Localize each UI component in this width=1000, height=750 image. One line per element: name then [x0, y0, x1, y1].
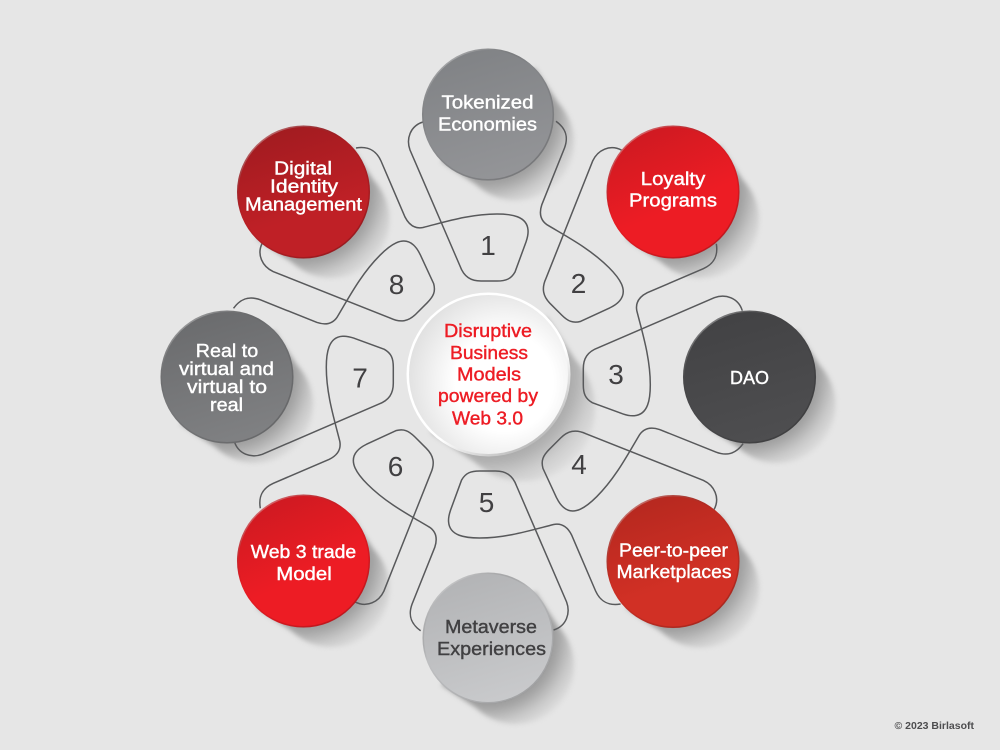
node: Peer-to-peer Marketplaces: Marketplaces [616, 561, 732, 582]
node: Real to virtual and virtual to real: real [210, 394, 243, 415]
drop shadows of the circles [180, 68, 836, 724]
node: Metaverse Experiences: Metaverse [445, 616, 537, 637]
connector loop 6 [281, 415, 515, 649]
node: DAO [683, 310, 816, 444]
connector loop 4 [527, 350, 761, 584]
node: Web 3 trade Model: Web 3 trade [251, 541, 356, 562]
connector loop 7 [234, 336, 393, 508]
connector loop 1 [356, 122, 528, 281]
copyright: © 2023 Birlasoft [894, 721, 975, 732]
node: Real to virtual and virtual to real: virtual to [187, 376, 267, 397]
centre hub: Disruptive Business Models powered by Web 3.0: Models [457, 364, 521, 384]
centre hub: Disruptive Business Models powered by Web 3.0: Web 3.0 [452, 408, 523, 428]
node: Digital Identity Management: Identity [270, 176, 339, 197]
connector loop 3 [583, 244, 742, 416]
node: Metaverse Experiences: Experiences [437, 638, 546, 659]
number 6: 6 [388, 451, 403, 482]
node: Loyalty Programs [606, 126, 740, 258]
connector loop 8 [215, 168, 449, 402]
node: Web 3 trade Model [237, 494, 370, 628]
node: Digital Identity Management: Digital [274, 158, 332, 178]
centre hub: Disruptive Business Models powered by Web 3.0: Business [450, 342, 528, 363]
node: Tokenized Economies: Tokenized [442, 92, 534, 113]
node: Metaverse Experiences [422, 572, 554, 704]
node: Loyalty Programs: Programs [629, 190, 717, 211]
centre hub: Disruptive Business Models powered by Web 3.0: Disruptive [444, 320, 532, 341]
node: Digital Identity Management: Management [245, 194, 362, 215]
node: Web 3 trade Model: Model [276, 563, 332, 584]
number 3: 3 [608, 359, 624, 390]
node: Real to virtual and virtual to real [160, 310, 294, 444]
number 4: 4 [571, 449, 587, 480]
centre hub: Disruptive Business Models powered by Web 3.0 [406, 292, 570, 456]
node: Digital Identity Management [237, 126, 370, 258]
number 1: 1 [480, 230, 496, 261]
node: Peer-to-peer Marketplaces: Peer-to-peer [619, 540, 728, 561]
connector loop 5 [449, 471, 621, 630]
node: Loyalty Programs: Loyalty [641, 168, 706, 189]
number 8: 8 [389, 269, 404, 300]
node: Real to virtual and virtual to real: virtual and [179, 358, 274, 379]
connector loop 2 [462, 103, 696, 337]
number 5: 5 [479, 487, 494, 518]
number 2: 2 [571, 268, 586, 299]
node: Tokenized Economies: Economies [438, 114, 537, 135]
node: Real to virtual and virtual to real: Real to [196, 340, 258, 361]
number 7: 7 [352, 362, 368, 394]
node: Tokenized Economies [422, 48, 554, 180]
centre hub: Disruptive Business Models powered by Web 3.0: powered by [438, 385, 539, 406]
node: Peer-to-peer Marketplaces [606, 495, 740, 628]
node: DAO: DAO [730, 367, 769, 388]
